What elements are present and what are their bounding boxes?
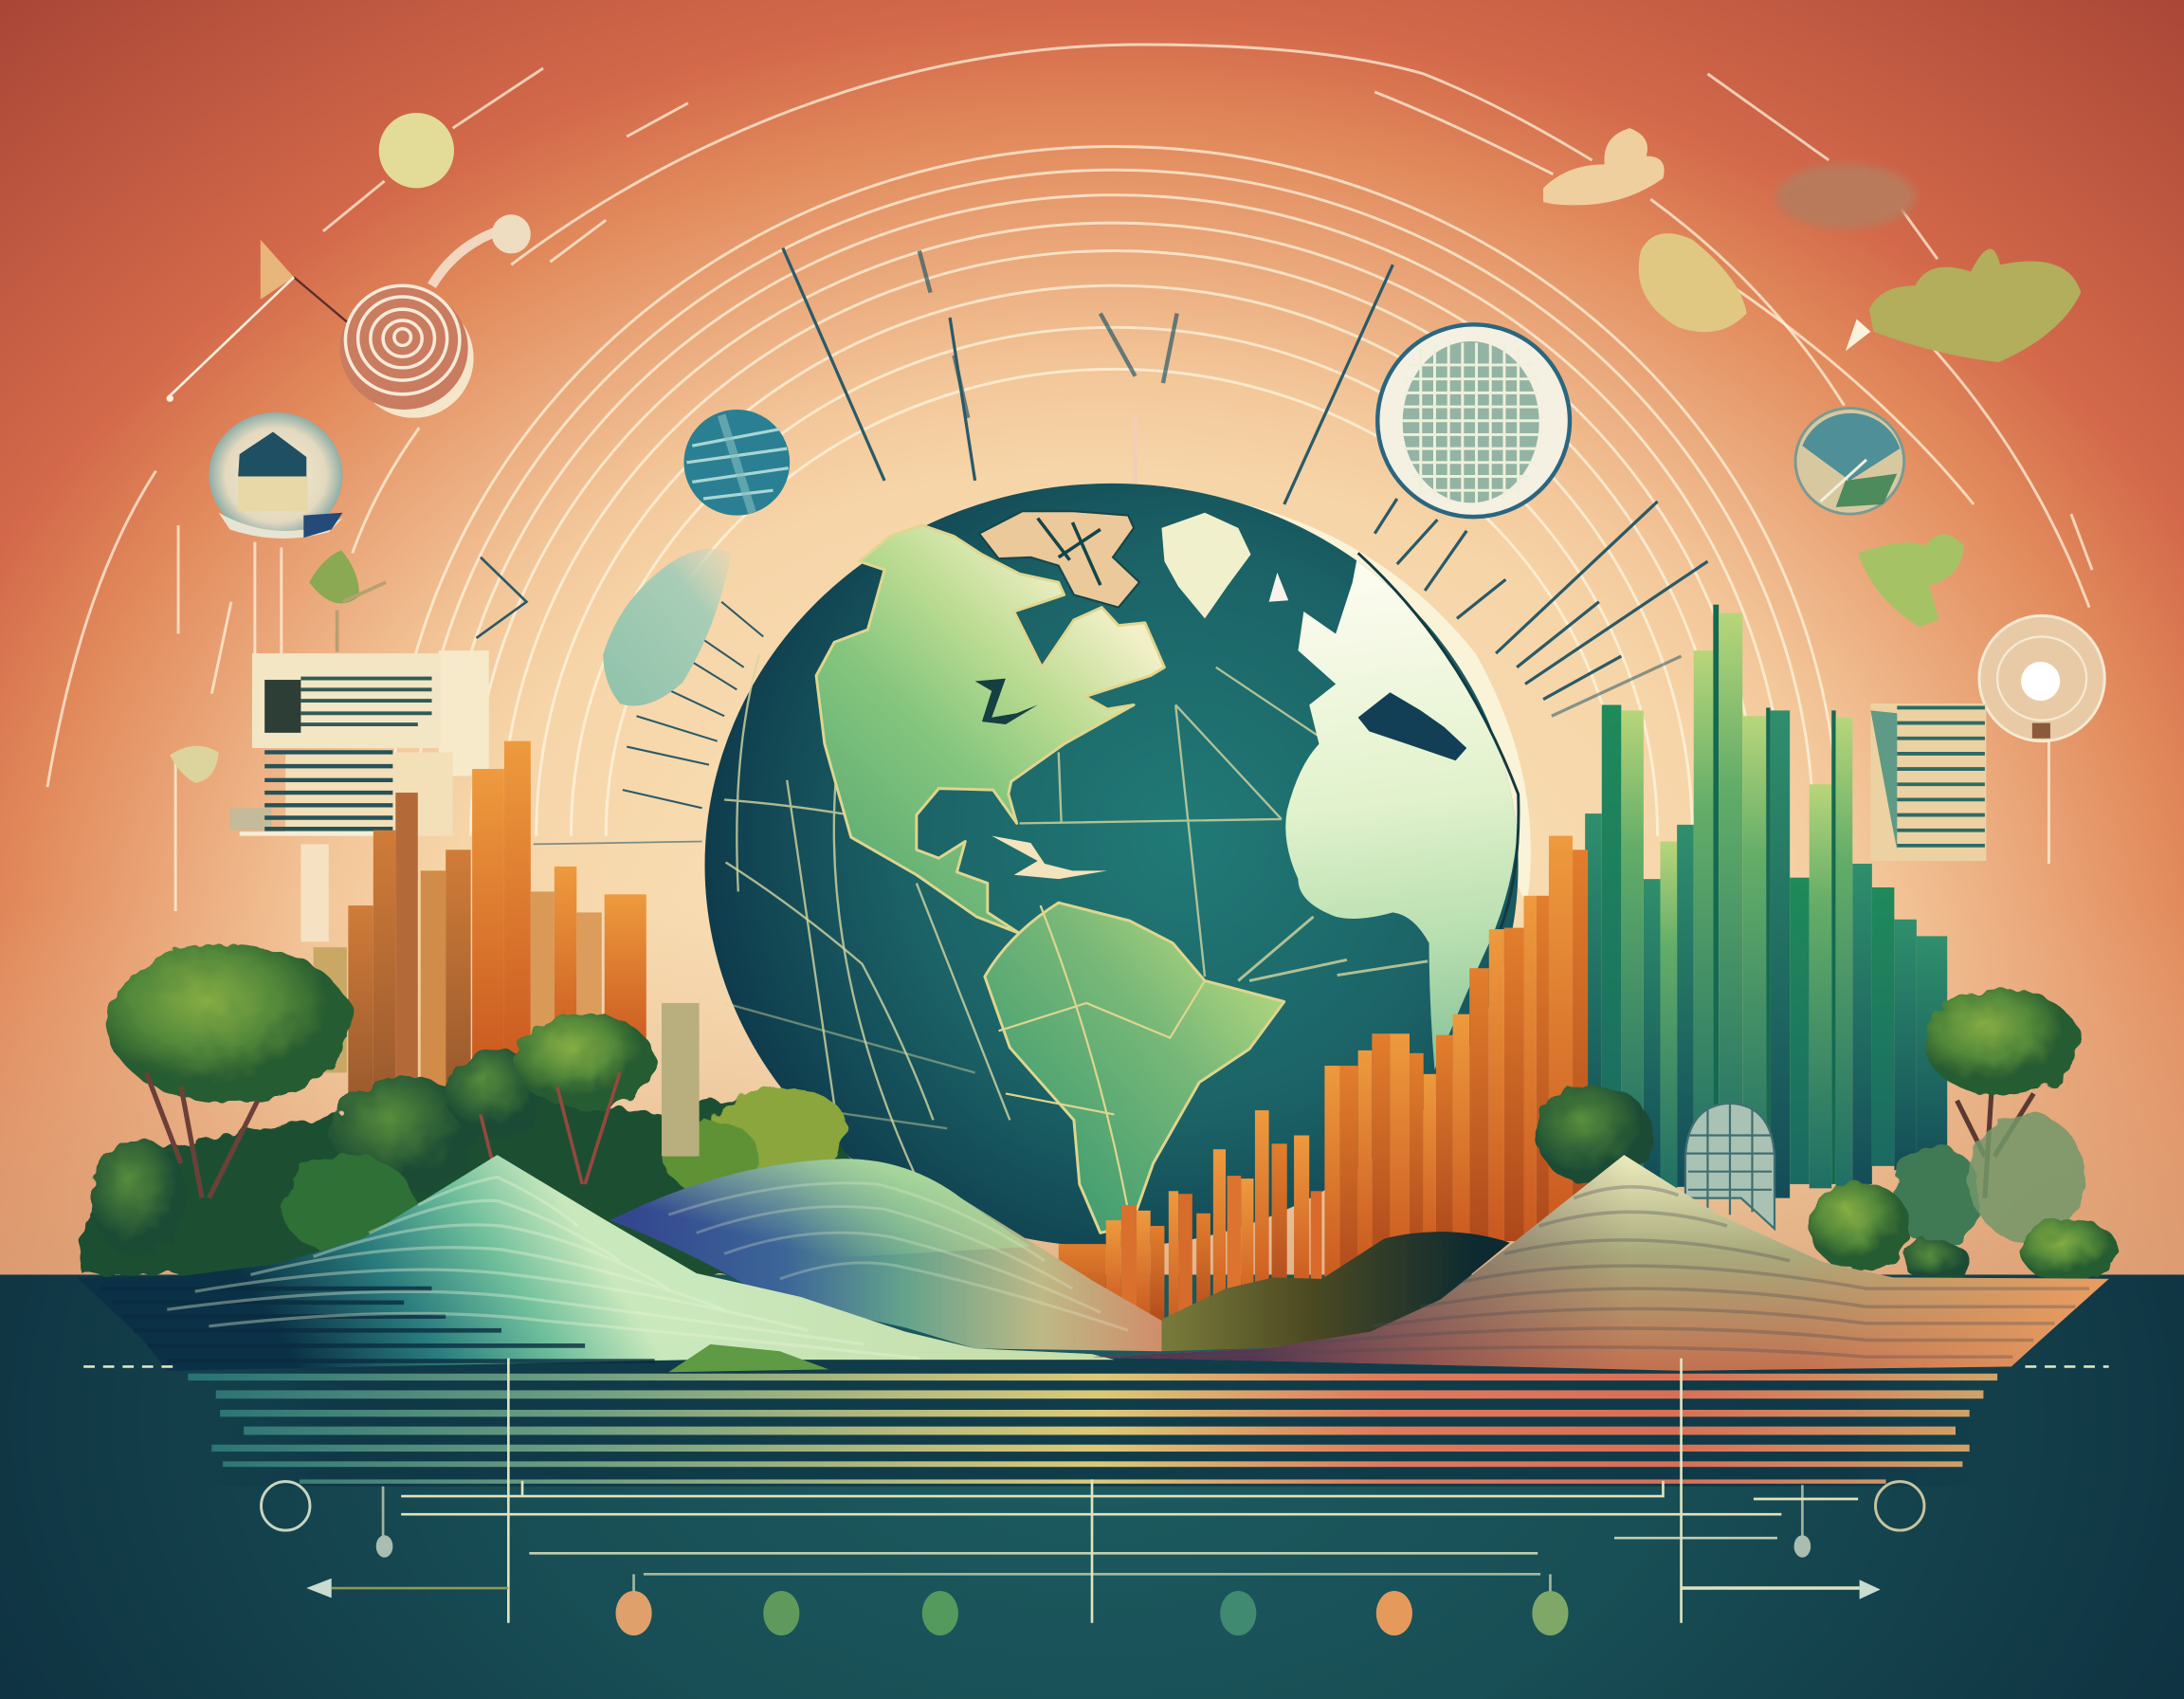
dark band behind stripes [195, 1359, 1992, 1487]
island: small white [1269, 573, 1288, 602]
orb: blue planet [683, 410, 790, 516]
continent: Arctic islands [979, 511, 1139, 608]
right hill wave lines [1184, 1187, 2089, 1357]
mesh dome right [1685, 1104, 1774, 1229]
arrow: right [1860, 1580, 1881, 1599]
continent: small mark [975, 679, 1038, 724]
grass patch [668, 1344, 828, 1372]
building left [229, 650, 489, 941]
stripes: horizontal chart bands [188, 1374, 1997, 1484]
sprout left [309, 550, 386, 652]
background lower tint [0, 905, 2184, 1282]
trees: right group [1537, 989, 2120, 1282]
dark brown hill [1161, 1232, 1510, 1351]
orb: mesh sphere top right [1377, 324, 1570, 517]
meridians [724, 655, 1428, 1184]
bar chart: right green skyline [1585, 605, 1947, 1198]
axis: bottom chart lines [83, 1359, 2109, 1623]
continent: Greenland [1161, 513, 1251, 618]
right hill [1092, 1155, 2109, 1371]
bar chart: foreground orange rising bars [1059, 836, 1588, 1333]
concentric arcs [47, 45, 2092, 911]
pale Eurasia and Africa [1285, 553, 1519, 1069]
background sky [0, 0, 2184, 1288]
continent: North America [816, 525, 1164, 933]
building right [1870, 703, 1986, 861]
orb: green gauge right [1795, 409, 1904, 514]
orb: small comet [432, 214, 531, 285]
pale bubble beside globe [603, 549, 731, 705]
trees: left group [80, 944, 891, 1274]
left hill wave lines [167, 1178, 919, 1359]
arrow: left [306, 1579, 332, 1598]
ring marker: left [262, 1482, 310, 1530]
radial spokes around globe [477, 248, 1707, 844]
globe ocean [705, 484, 1519, 1247]
middle hill [610, 1159, 1161, 1351]
continent: Caribbean [992, 836, 1107, 879]
kite marker and tether [167, 240, 347, 402]
Mediterranean sea [1358, 692, 1466, 760]
orb: spiral circle [340, 285, 474, 418]
pole mark above globe [1134, 418, 1137, 519]
globe [705, 484, 1531, 1247]
South America veins [999, 905, 1205, 1226]
orb: light bulb right [1979, 615, 2104, 741]
bar chart: left orange skyline [314, 741, 646, 1101]
orb: pale sun top left [379, 113, 454, 188]
leaf left small [170, 746, 219, 783]
sea band [0, 1274, 2184, 1699]
arctic channel marks [1038, 519, 1101, 585]
hills: layered wave mountains [77, 1155, 2109, 1372]
glow behind globe limb [1198, 495, 1531, 905]
continent: South America [985, 903, 1284, 1233]
clouds top right [1543, 128, 2081, 362]
ring marker: right [1876, 1482, 1924, 1530]
dots: timeline markers [615, 1591, 1569, 1635]
leaf right [1858, 534, 1964, 627]
globe limb outline [1358, 553, 1519, 933]
small pins [376, 1535, 1811, 1558]
left hill [77, 1155, 1115, 1371]
orb: dome building [209, 412, 342, 539]
middle hill wave lines [668, 1183, 1128, 1330]
hill shadow stripes [100, 1288, 655, 1361]
